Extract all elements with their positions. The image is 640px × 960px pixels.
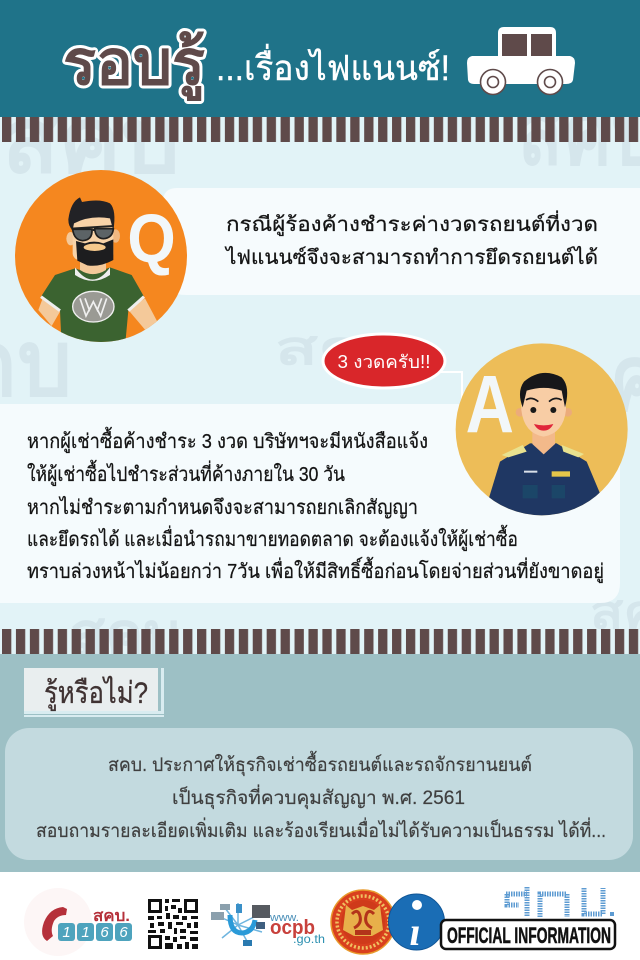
icon: car [467, 27, 575, 94]
background watermarks: สค [275, 322, 365, 374]
logo: hotline 1166: สคบ. [93, 908, 130, 925]
answer text: และยึดรถได้ และเมื่อนำรถมาขายทอดตลาด จะต้องแจ้งให้ผู้เช่าซื้อ [27, 525, 518, 552]
callout: answer bubble [323, 334, 445, 388]
title [63, 29, 450, 101]
panel: did you know text: สคบ. ประกาศให้ธุรกิจเช่าซื้อรถยนต์และรถจักรยานยนต์ [108, 751, 532, 777]
callout: answer bubble: 3 งวดครับ!! [338, 352, 430, 372]
title keyword: รอบรู้ [63, 29, 205, 101]
QR code [147, 898, 198, 949]
answer text [27, 427, 604, 584]
icon: information: ı [409, 909, 421, 954]
background watermarks [0, 82, 640, 668]
logo: hotline 1166: 6 [100, 924, 109, 941]
logo: ocpb website [211, 903, 325, 946]
icon: officer in uniform, A [456, 343, 628, 520]
panel: did you know text: สอบถามรายละเอียดเพิ่มเติม และร้องเรียนเมื่อไม่ได้รับความเป็นธรรม ได้ที่... [36, 817, 606, 842]
bottom stripe divider [0, 629, 640, 654]
letter Q: Q [127, 201, 176, 277]
answer text: หากผู้เช่าซื้อค้างชำระ 3 งวด บริษัทฯจะมีหนังสือแจ้ง [27, 427, 428, 454]
logo: ocpb website: .go.th [293, 932, 325, 946]
panel: did you know text [5, 728, 633, 860]
icon: man with beard, Q [15, 170, 187, 347]
answer text: ให้ผู้เช่าซื้อไปชำระส่วนที่ค้างภายใน 30 วัน [27, 460, 345, 487]
logo: official information [441, 887, 615, 949]
panel: question [163, 188, 640, 295]
logo: ocpb website: www. [269, 912, 299, 924]
logo: hotline 1166: 1 [81, 924, 90, 941]
heading: did you know [24, 668, 164, 716]
answer text: หากไม่ชำระตามกำหนดจึงจะสามารถยกเลิกสัญญา [27, 496, 418, 519]
panel: answer [0, 404, 620, 603]
top stripe divider [0, 117, 640, 142]
connector from callout [436, 372, 462, 404]
icon: information [388, 894, 444, 954]
background watermarks: สคบ [2, 90, 180, 192]
letter A: A [466, 360, 514, 451]
question text: ไฟแนนซ์จึงจะสามารถทำการยึดรถยนต์ได้ [224, 246, 598, 269]
logo: ocpb website: ocpb [270, 917, 315, 939]
title subject: ...เรื่องไฟแนนซ์! [216, 44, 450, 88]
logo: hotline 1166: 1 [62, 924, 71, 941]
bottom teal section [0, 654, 640, 872]
background watermarks: สคบ [70, 601, 180, 668]
question text [224, 210, 598, 269]
logo: hotline 1166: 6 [119, 924, 128, 941]
header band [0, 0, 640, 117]
logo: hotline 1166 [24, 888, 132, 956]
panel: did you know text: เป็นธุรกิจที่ควบคุมสัญญา พ.ศ. 2561 [172, 784, 465, 810]
footer band [0, 872, 640, 960]
heading: did you know: รู้หรือไม่? [44, 675, 148, 711]
logo: red seal [331, 890, 395, 954]
question text: กรณีผู้ร้องค้างชำระค่างวดรถยนต์ที่งวด [226, 210, 598, 237]
